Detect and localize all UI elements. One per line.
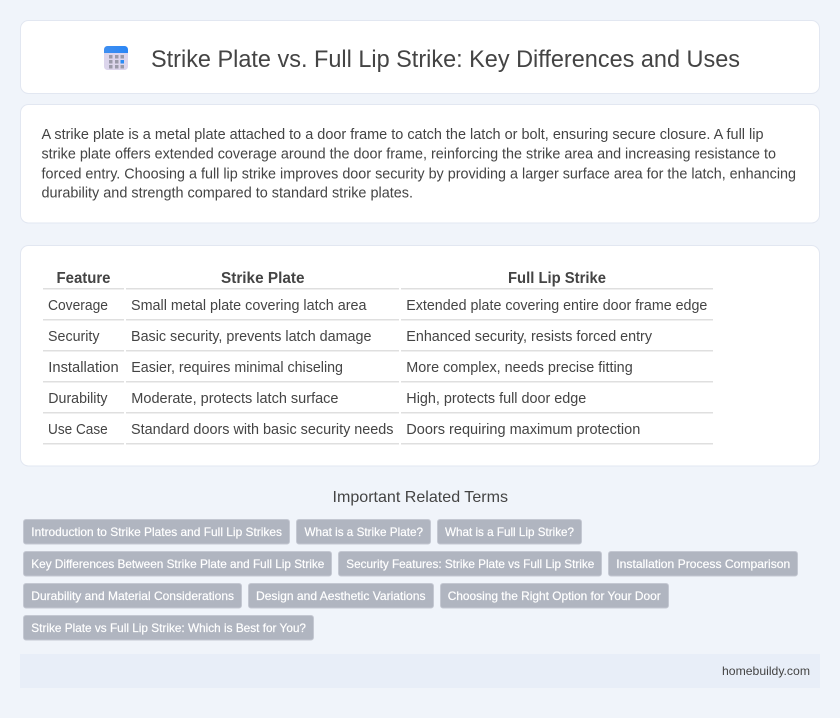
- footer bar: [20, 654, 820, 688]
- table row: security: [43, 329, 713, 352]
- table row: use case: Standard doors with basic security needs: [131, 422, 394, 438]
- panel: introduction text: [20, 104, 820, 223]
- tag: Choosing the Right Option for Your Door: [448, 589, 661, 603]
- table row: coverage: Small metal plate covering latch area: [131, 298, 366, 314]
- tag: [24, 520, 290, 544]
- table row: coverage: Coverage: [48, 298, 108, 314]
- table row: installation: Easier, requires minimal chiseling: [131, 360, 343, 376]
- table row: use case: [43, 422, 713, 444]
- title: Strike Plate vs. Full Lip Strike: Key Differences and Uses: [151, 46, 740, 73]
- tag: Strike Plate vs Full Lip Strike: Which is Best for You?: [31, 621, 306, 635]
- tag: Design and Aesthetic Variations: [256, 589, 426, 603]
- tag: Installation Process Comparison: [616, 557, 790, 571]
- panel: comparison table: [20, 246, 820, 466]
- tag: [248, 584, 434, 608]
- text block: description: [42, 127, 796, 202]
- tag: [24, 552, 332, 576]
- tag: [338, 552, 602, 576]
- table header row: [43, 270, 713, 290]
- panel: related term tags: [24, 520, 798, 640]
- table row: security: Basic security, prevents latch damage: [131, 329, 372, 345]
- tag: What is a Strike Plate?: [304, 525, 423, 539]
- tag: [296, 520, 430, 544]
- tag: [24, 584, 242, 608]
- heading: important related terms: Important Related Terms: [332, 489, 508, 506]
- footer source text: homebuildy.com: [722, 664, 810, 678]
- table row: coverage: Extended plate covering entire door frame edge: [406, 298, 707, 314]
- table row: durability: High, protects full door edge: [406, 391, 586, 407]
- tag: What is a Full Lip Strike?: [445, 525, 574, 539]
- table header row: Full Lip Strike: [508, 270, 606, 287]
- table row: installation: [43, 360, 713, 382]
- text block: description: forced entry. Choosing a full lip strike improves door security by providing a larger surface area for the latch, enhancing: [42, 166, 796, 182]
- table row: installation: More complex, needs precise fitting: [406, 360, 633, 376]
- table row: durability: [43, 391, 713, 414]
- tag: [440, 584, 668, 608]
- text block: description: durability and strength compared to standard strike plates.: [42, 186, 413, 202]
- tag: [438, 520, 582, 544]
- icon: calendar: [104, 46, 128, 70]
- table header row: Feature: [56, 270, 111, 287]
- table row: use case: Doors requiring maximum protection: [406, 422, 640, 438]
- table row: use case: Use Case: [48, 422, 108, 438]
- tag: [24, 616, 314, 640]
- tag: Introduction to Strike Plates and Full Lip Strikes: [31, 525, 282, 539]
- text block: description: strike plate offers extended coverage around the door frame, reinforcing the strike area and increasing resistance to: [42, 146, 776, 162]
- table row: durability: Moderate, protects latch surface: [131, 391, 338, 407]
- tag: Security Features: Strike Plate vs Full Lip Strike: [346, 557, 595, 571]
- text block: description: A strike plate is a metal plate attached to a door frame to catch the latch or bolt, ensuring secure closure. A full lip: [42, 127, 764, 143]
- tag: Key Differences Between Strike Plate and Full Lip Strike: [31, 557, 325, 571]
- table row: installation: Installation: [48, 360, 119, 376]
- table row: durability: Durability: [48, 391, 108, 407]
- table row: security: Enhanced security, resists forced entry: [406, 329, 653, 345]
- tag: Durability and Material Considerations: [31, 589, 234, 603]
- table header row: Strike Plate: [221, 270, 305, 287]
- tag: [608, 552, 798, 576]
- table row: security: Security: [48, 329, 100, 345]
- table row: coverage: [43, 298, 713, 320]
- panel: header: [20, 20, 820, 94]
